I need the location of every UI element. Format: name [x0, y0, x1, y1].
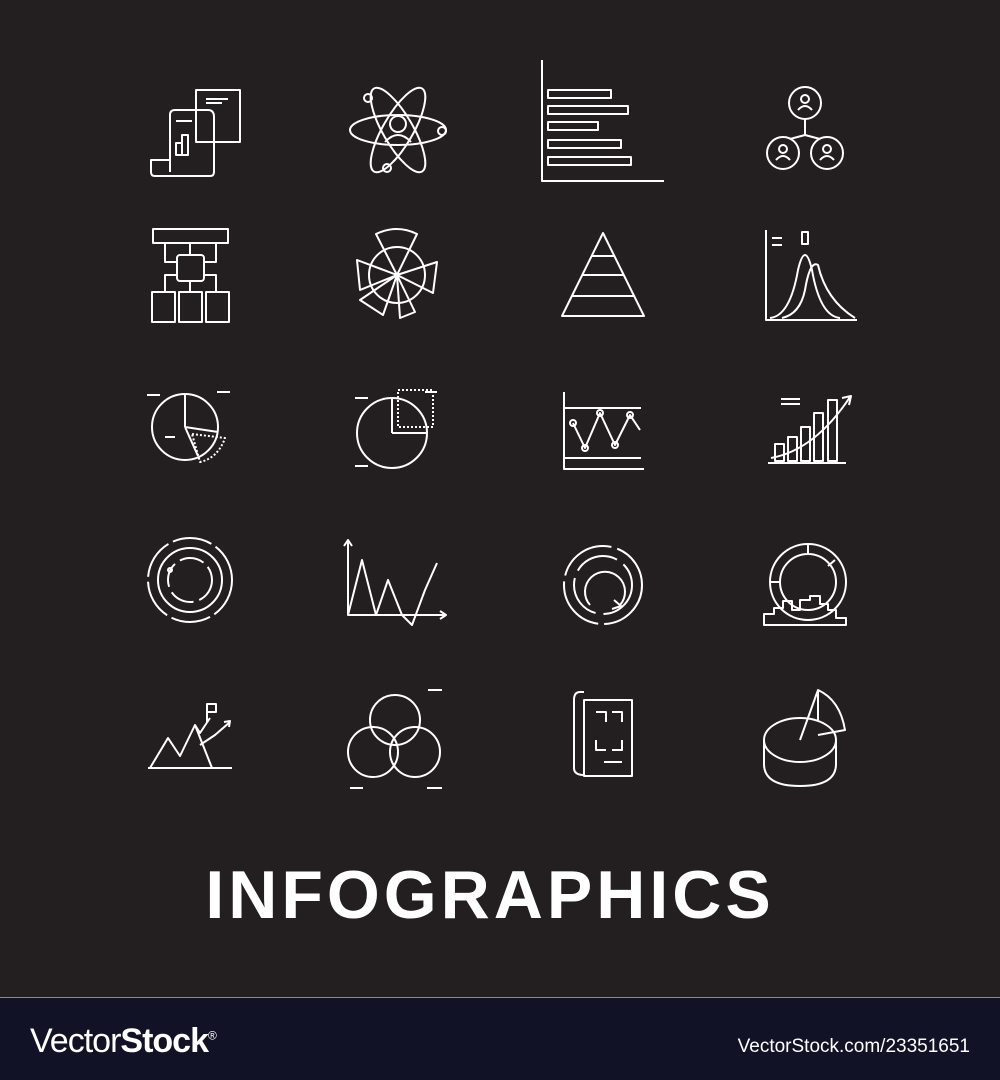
icon: pie chart with slice: [355, 390, 437, 468]
icon: spike chart: [344, 540, 446, 625]
icon: segmented ring: [148, 538, 232, 622]
icon: venn diagram: [348, 690, 442, 788]
icon: growth bars: [768, 396, 851, 463]
icon: 3d pie: [764, 690, 845, 786]
icon: line chart zigzag: [564, 392, 644, 469]
icon: team network: [767, 87, 843, 169]
icon: pie chart with lines: [147, 392, 230, 462]
icon: pyramid: [562, 233, 644, 316]
icon: atom with user: [350, 81, 446, 179]
icon: horizontal bar chart: [542, 60, 664, 181]
icon: bell curves: [766, 230, 857, 320]
icon: report scroll: [151, 90, 240, 176]
icon: ring with histogram: [764, 544, 846, 625]
logo: VectorStock®: [30, 1022, 216, 1060]
icon: blueprint: [574, 692, 632, 776]
icon: cycle arrows: [564, 546, 642, 624]
icon: polar chart: [357, 229, 437, 318]
icon: flowchart: [152, 229, 229, 322]
icon: mountains with flag: [148, 704, 232, 768]
title: INFOGRAPHICS: [205, 857, 775, 933]
url: VectorStock.com/23351651: [738, 1036, 970, 1057]
